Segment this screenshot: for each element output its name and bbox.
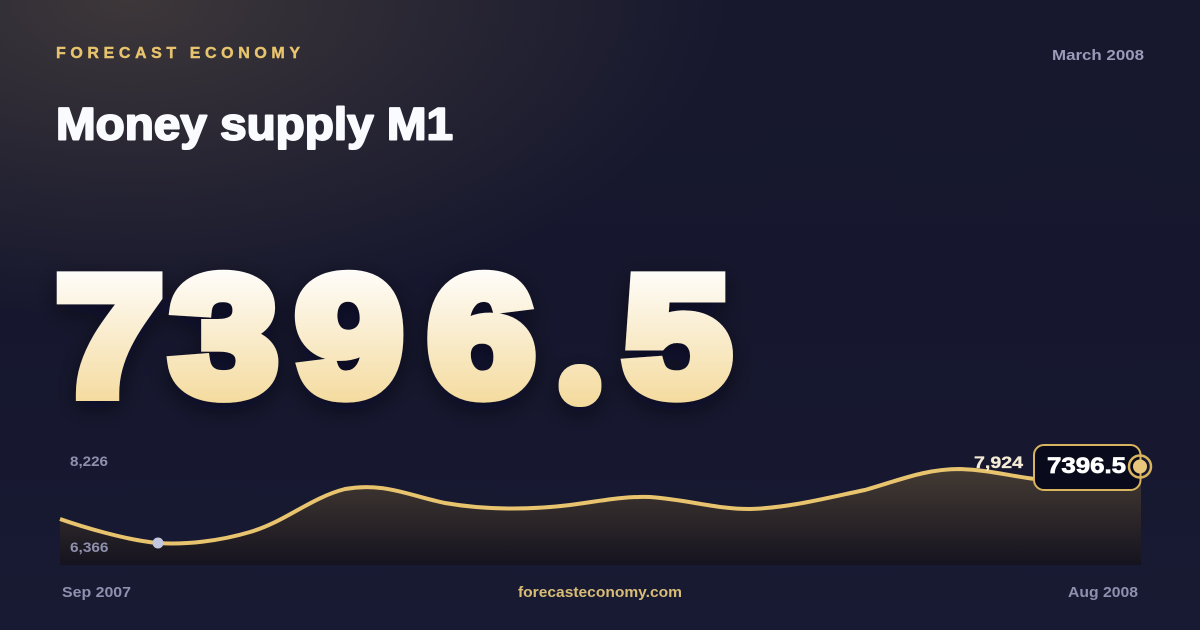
big value: 7 bbox=[56, 243, 163, 430]
axis max label: 8,226 bbox=[70, 454, 109, 469]
big value: 5 bbox=[624, 243, 730, 430]
end date label: Aug 2008 bbox=[1068, 585, 1138, 601]
big value: 9 bbox=[296, 243, 403, 430]
big value bbox=[56, 243, 730, 430]
current point marker bbox=[1129, 456, 1151, 478]
sparkline chart bbox=[60, 445, 1151, 565]
brand eyebrow: FORECAST ECONOMY bbox=[56, 45, 300, 62]
trend line bbox=[60, 469, 1035, 544]
current value badge bbox=[1034, 445, 1140, 490]
date: March 2008 bbox=[1052, 47, 1144, 64]
big value: 3 bbox=[171, 243, 277, 430]
area fill bbox=[60, 469, 1141, 565]
big value: 6 bbox=[428, 243, 535, 430]
axis min label: 6,366 bbox=[70, 540, 109, 555]
low point marker bbox=[152, 538, 164, 548]
big value: . bbox=[577, 370, 583, 392]
title: Money supply M1 bbox=[56, 98, 453, 150]
current value badge: 7396.5 bbox=[1047, 453, 1126, 478]
peak label: 7,924 bbox=[974, 453, 1024, 472]
site url: forecasteconomy.com bbox=[518, 585, 682, 601]
start date label: Sep 2007 bbox=[62, 585, 131, 601]
